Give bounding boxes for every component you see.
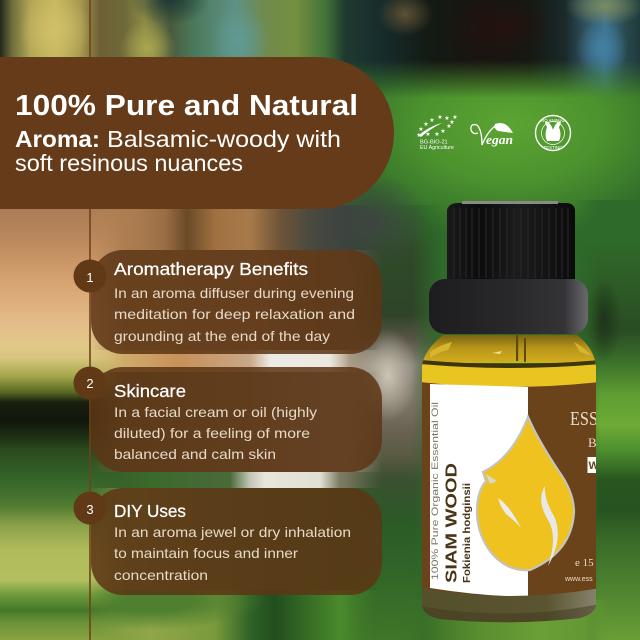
card 3: diy uses (74, 488, 382, 595)
aroma description: soft resinous nuances (15, 150, 243, 176)
label vertical text: Fokienia hodginsii (462, 483, 473, 583)
product bottle (420, 201, 600, 625)
label brand text: www.ess (564, 576, 593, 583)
timeline vertical line (89, 0, 91, 640)
label brand text (565, 412, 596, 581)
label vertical text (430, 402, 473, 583)
aroma description (15, 126, 341, 176)
label brand text: ESS (570, 408, 598, 430)
icon: eu organic leaf badge: ★ (425, 131, 431, 138)
icon: eu organic leaf badge: BG-BIO-21 (420, 140, 448, 146)
card 1 body (114, 285, 355, 344)
black cap (447, 201, 575, 279)
dropper collar (429, 279, 588, 334)
card 2 body (114, 404, 317, 462)
icon: eu organic leaf badge: ★ (429, 117, 435, 124)
header panel (0, 57, 394, 209)
icon: eu organic leaf badge: ★ (434, 131, 440, 138)
card 2 body: balanced and calm skin (114, 446, 276, 462)
icon: eu organic leaf badge: ★ (446, 123, 452, 130)
number badge 1: 1 (86, 270, 94, 285)
bottle glass (420, 333, 600, 625)
icon: no animal testing badge (536, 116, 570, 150)
icon: no animal testing badge: NO ANIMAL (541, 118, 566, 123)
oil drop graphic (477, 417, 574, 570)
card 1 body: meditation for deep relaxation and (114, 306, 355, 322)
title: 100% Pure and Natural (15, 90, 358, 122)
label vertical text: SIAM WOOD (444, 463, 460, 583)
number badge 3 (74, 492, 106, 524)
icon: eu organic leaf badge: ★ (423, 121, 429, 128)
number badge 2: 2 (86, 376, 94, 391)
card 3 body: In an aroma jewel or dry inhalation (114, 524, 351, 540)
label brand text: e 15 (575, 557, 594, 569)
number badge 2 (74, 366, 106, 400)
card 3 body (114, 524, 351, 583)
icon: vegan badge: egan (486, 133, 513, 147)
number badge 1 (74, 260, 106, 292)
card 1 body: In an aroma diffuser during evening (114, 285, 354, 301)
label vertical text: 100% Pure Organic Essential Oil (430, 402, 441, 580)
icon: eu organic leaf badge: ★ (444, 115, 450, 122)
number badge 3: 3 (86, 502, 94, 517)
icon: eu organic leaf badge: ★ (437, 114, 443, 121)
card 2 body: In a facial cream or oil (highly (114, 404, 317, 420)
icon: vegan badge (471, 123, 513, 147)
card 2 body: diluted) for a feeling of more (114, 425, 310, 441)
icon: eu organic leaf badge: ★ (416, 132, 422, 139)
icon: eu organic leaf badge: ★ (452, 114, 458, 121)
label brand text: W (588, 460, 600, 472)
aroma description: Aroma: (15, 126, 100, 152)
aroma description: Balsamic-woody with (107, 126, 341, 152)
card 2: skincare (74, 366, 382, 472)
card 1: aromatherapy benefits (74, 250, 382, 354)
icon: eu organic leaf badge: ★ (440, 128, 446, 135)
card 3 heading: DIY Uses (114, 501, 186, 521)
icon: eu organic leaf badge (416, 114, 458, 151)
card 2 heading: Skincare (114, 381, 186, 401)
icon: eu organic leaf badge: ★ (418, 126, 424, 133)
card 3 body: to maintain focus and inner (114, 545, 298, 561)
card 3 body: concentration (114, 567, 208, 583)
icon: eu organic leaf badge: EU Agriculture (420, 145, 454, 151)
card 1 heading: Aromatherapy Benefits (114, 259, 308, 279)
card 1 body: grounding at the end of the day (114, 328, 330, 344)
icon: no animal testing badge: TESTING (543, 145, 563, 150)
icon: eu organic leaf badge: ★ (449, 119, 455, 126)
label brand text: B (588, 435, 597, 450)
